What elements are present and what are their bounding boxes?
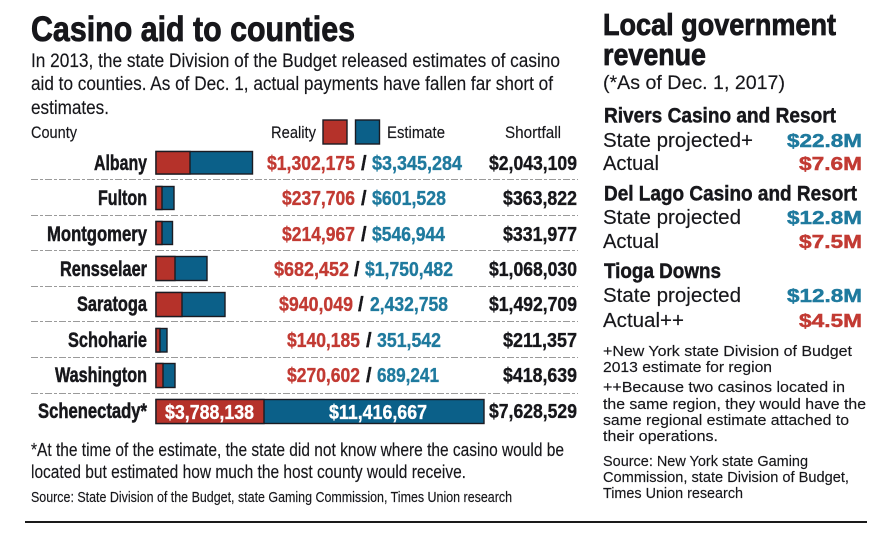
row: Fulton: $237,706 xyxy=(282,188,355,210)
row: Schoharie: $140,185 xyxy=(287,330,360,352)
heading: Local government xyxy=(603,7,836,42)
row: Montgomery xyxy=(47,222,577,246)
row: Schoharie: Schoharie xyxy=(68,329,147,352)
note: plus: +New York state Division of Budget xyxy=(603,343,853,360)
row: Montgomery: $331,977 xyxy=(503,224,577,246)
footnote xyxy=(31,440,564,482)
row: Albany: $3,345,284 xyxy=(372,153,463,175)
Del Lago Casino and Resort: Del Lago Casino and Resort xyxy=(604,182,857,206)
intro text: In 2013, the state Division of the Budget released estimates of casino xyxy=(31,51,560,72)
note: double plus: their operations. xyxy=(603,428,718,445)
row: Fulton: / xyxy=(361,188,367,210)
Tioga Downs: State projected xyxy=(603,285,741,307)
row: Saratoga xyxy=(77,292,577,316)
panel: casino aid to counties xyxy=(31,10,577,506)
Rivers Casino and Resort: State projected+ xyxy=(603,130,753,152)
Del Lago Casino and Resort: $12.8M xyxy=(787,207,862,228)
row: Rensselaer: $1,750,482 xyxy=(365,259,453,281)
row: Albany: Albany xyxy=(94,152,147,175)
row: Albany: $2,043,109 xyxy=(489,153,577,175)
Tioga Downs: Tioga Downs xyxy=(604,260,721,283)
date note: (*As of Dec. 1, 2017) xyxy=(603,73,785,94)
row: Rensselaer: Rensselaer xyxy=(60,258,147,281)
row: Schenectady: $3,788,138 xyxy=(165,402,254,424)
Del Lago Casino and Resort: Actual xyxy=(603,231,659,253)
row: Rensselaer xyxy=(60,256,577,281)
row: Albany: / xyxy=(361,153,367,175)
table header: County xyxy=(31,123,77,142)
row: Montgomery: Montgomery xyxy=(47,223,147,246)
table header: Estimate xyxy=(387,123,445,142)
Del Lago Casino and Resort xyxy=(603,182,862,253)
Rivers Casino and Resort xyxy=(603,104,862,175)
row: Saratoga: $1,492,709 xyxy=(489,294,577,316)
Tioga Downs: $12.8M xyxy=(787,285,862,306)
intro text xyxy=(31,51,560,119)
source: Source: State Division of the Budget, state Gaming Commission, Times Union research xyxy=(31,490,512,506)
row: Schenectady xyxy=(38,400,577,424)
note: double plus xyxy=(603,379,866,445)
row: Schoharie: 351,542 xyxy=(377,330,441,352)
row: Washington: 689,241 xyxy=(377,365,439,387)
row: Fulton: $363,822 xyxy=(503,188,577,210)
footnote: *At the time of the estimate, the state did not know where the casino would be xyxy=(31,440,564,460)
source: Source: New York state Gaming xyxy=(603,453,808,470)
row: Schenectady: $7,628,529 xyxy=(489,401,577,423)
footnote: located but estimated how much the host county would receive. xyxy=(31,462,466,482)
Tioga Downs: Actual++ xyxy=(603,310,684,332)
row: Washington: / xyxy=(366,365,372,387)
note: double plus: the same region, they would have the xyxy=(603,396,866,413)
row: Schenectady: $11,416,667 xyxy=(329,402,427,424)
row: Washington: Washington xyxy=(55,364,147,387)
source xyxy=(603,453,849,502)
intro text: estimates. xyxy=(31,98,109,119)
heading xyxy=(603,7,836,72)
row: Saratoga: Saratoga xyxy=(77,293,147,316)
row: Schenectady: Schenectady* xyxy=(38,400,148,423)
row: Rensselaer: $1,068,030 xyxy=(489,259,577,281)
source: Commission, state Division of Budget, xyxy=(603,469,849,486)
Tioga Downs: $4.5M xyxy=(799,310,862,331)
table header xyxy=(31,120,561,144)
row: Saratoga: / xyxy=(358,294,364,316)
row: Montgomery: / xyxy=(361,224,367,246)
row: Fulton: Fulton xyxy=(98,187,147,210)
note: double plus: same regional estimate attached to xyxy=(603,412,849,429)
Rivers Casino and Resort: $22.8M xyxy=(787,130,862,151)
source: Times Union research xyxy=(603,485,743,502)
row: Montgomery: $214,967 xyxy=(282,224,355,246)
note: plus xyxy=(603,343,853,376)
Del Lago Casino and Resort: $7.5M xyxy=(799,231,862,252)
row: Washington xyxy=(55,364,577,388)
row: Rensselaer: / xyxy=(354,259,360,281)
table header: Shortfall xyxy=(505,123,561,142)
row: Montgomery: $546,944 xyxy=(372,224,446,246)
row: Albany xyxy=(94,152,577,175)
row: Schoharie: / xyxy=(366,330,372,352)
row: Rensselaer: $682,452 xyxy=(274,259,349,281)
row: Saratoga: 2,432,758 xyxy=(370,294,448,316)
row: Schoharie xyxy=(68,328,577,352)
row: Saratoga: $940,049 xyxy=(279,294,353,316)
row: Fulton xyxy=(98,186,577,210)
title: Casino aid to counties xyxy=(31,10,355,49)
row: Albany: $1,302,175 xyxy=(267,153,355,175)
row: Schoharie: $211,357 xyxy=(503,330,577,352)
row: Washington: $418,639 xyxy=(503,365,577,387)
table header: Reality xyxy=(271,123,316,142)
note: double plus: ++Because two casinos located in xyxy=(603,379,845,396)
Tioga Downs xyxy=(603,260,862,332)
panel: local government revenue xyxy=(603,7,866,502)
Rivers Casino and Resort: $7.6M xyxy=(799,153,862,174)
Rivers Casino and Resort: Actual xyxy=(603,153,659,175)
row: Fulton: $601,528 xyxy=(372,188,446,210)
row: Washington: $270,602 xyxy=(287,365,360,387)
Del Lago Casino and Resort: State projected xyxy=(603,207,741,229)
Rivers Casino and Resort: Rivers Casino and Resort xyxy=(604,104,836,128)
note: plus: 2013 estimate for region xyxy=(603,359,772,376)
heading: revenue xyxy=(603,37,706,72)
intro text: aid to counties. As of Dec. 1, actual payments have fallen far short of xyxy=(31,74,554,95)
